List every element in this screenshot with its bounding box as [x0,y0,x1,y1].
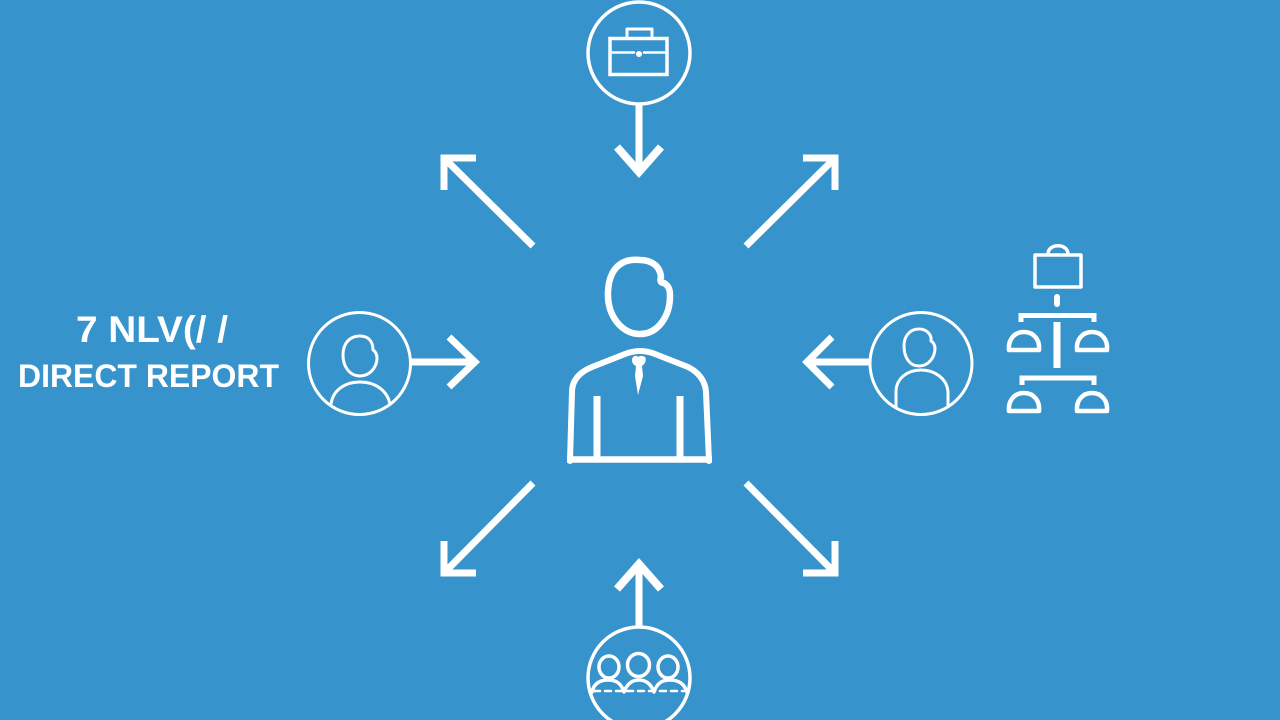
icon: team in circle (bottom) [588,627,690,720]
team shoulders [592,680,687,692]
arrow: bottom up to centre [617,564,661,627]
arrow: lower right [746,483,835,573]
team heads [599,656,619,678]
briefcase [1035,255,1081,287]
text label: direct report: 7 NLV(/ / [76,309,228,350]
connectors [1054,297,1060,304]
central person icon [567,260,712,461]
lower domes [1009,393,1039,411]
icon: briefcase in circle (top) [588,2,690,104]
arrow: right person to centre [807,337,869,387]
icon: org chart [1009,246,1107,411]
text label: direct report [18,309,279,394]
text label: direct report: DIRECT REPORT [18,358,279,394]
icon: person in circle (right) [870,312,972,414]
arrow: upper right [746,158,835,246]
head [608,260,670,334]
tie [632,356,646,395]
upper domes [1009,332,1039,350]
body [570,351,709,461]
arrow: top down to centre [617,105,661,172]
arrow: lower left [444,483,533,573]
icon: person in circle (left) [308,312,410,414]
arrow: left person to centre [411,337,475,387]
arrow: upper left [444,158,533,246]
